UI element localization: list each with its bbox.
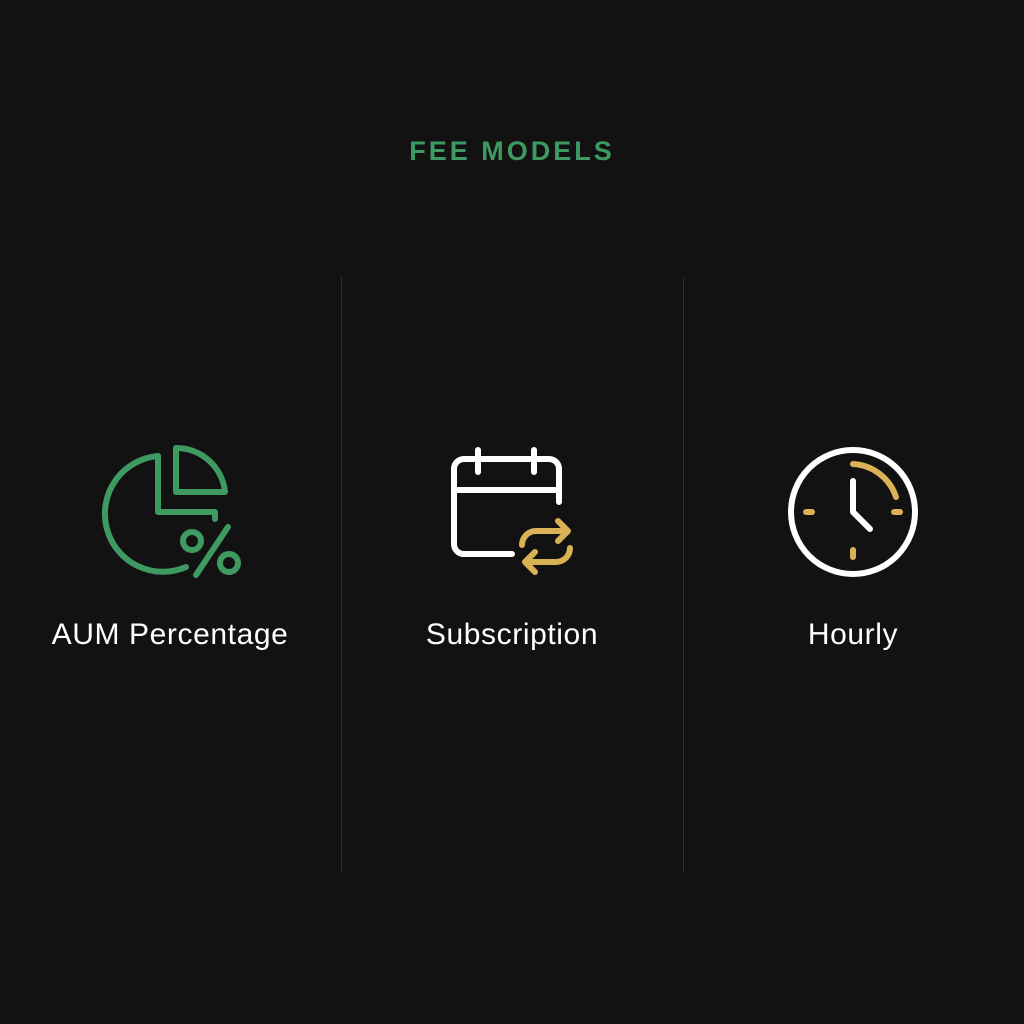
label: AUM: AUM Percentage xyxy=(52,618,288,651)
title: FEE MODELS xyxy=(409,136,615,166)
label: Subscription: Subscription xyxy=(426,618,598,651)
label: Hourly: Hourly xyxy=(808,618,898,651)
